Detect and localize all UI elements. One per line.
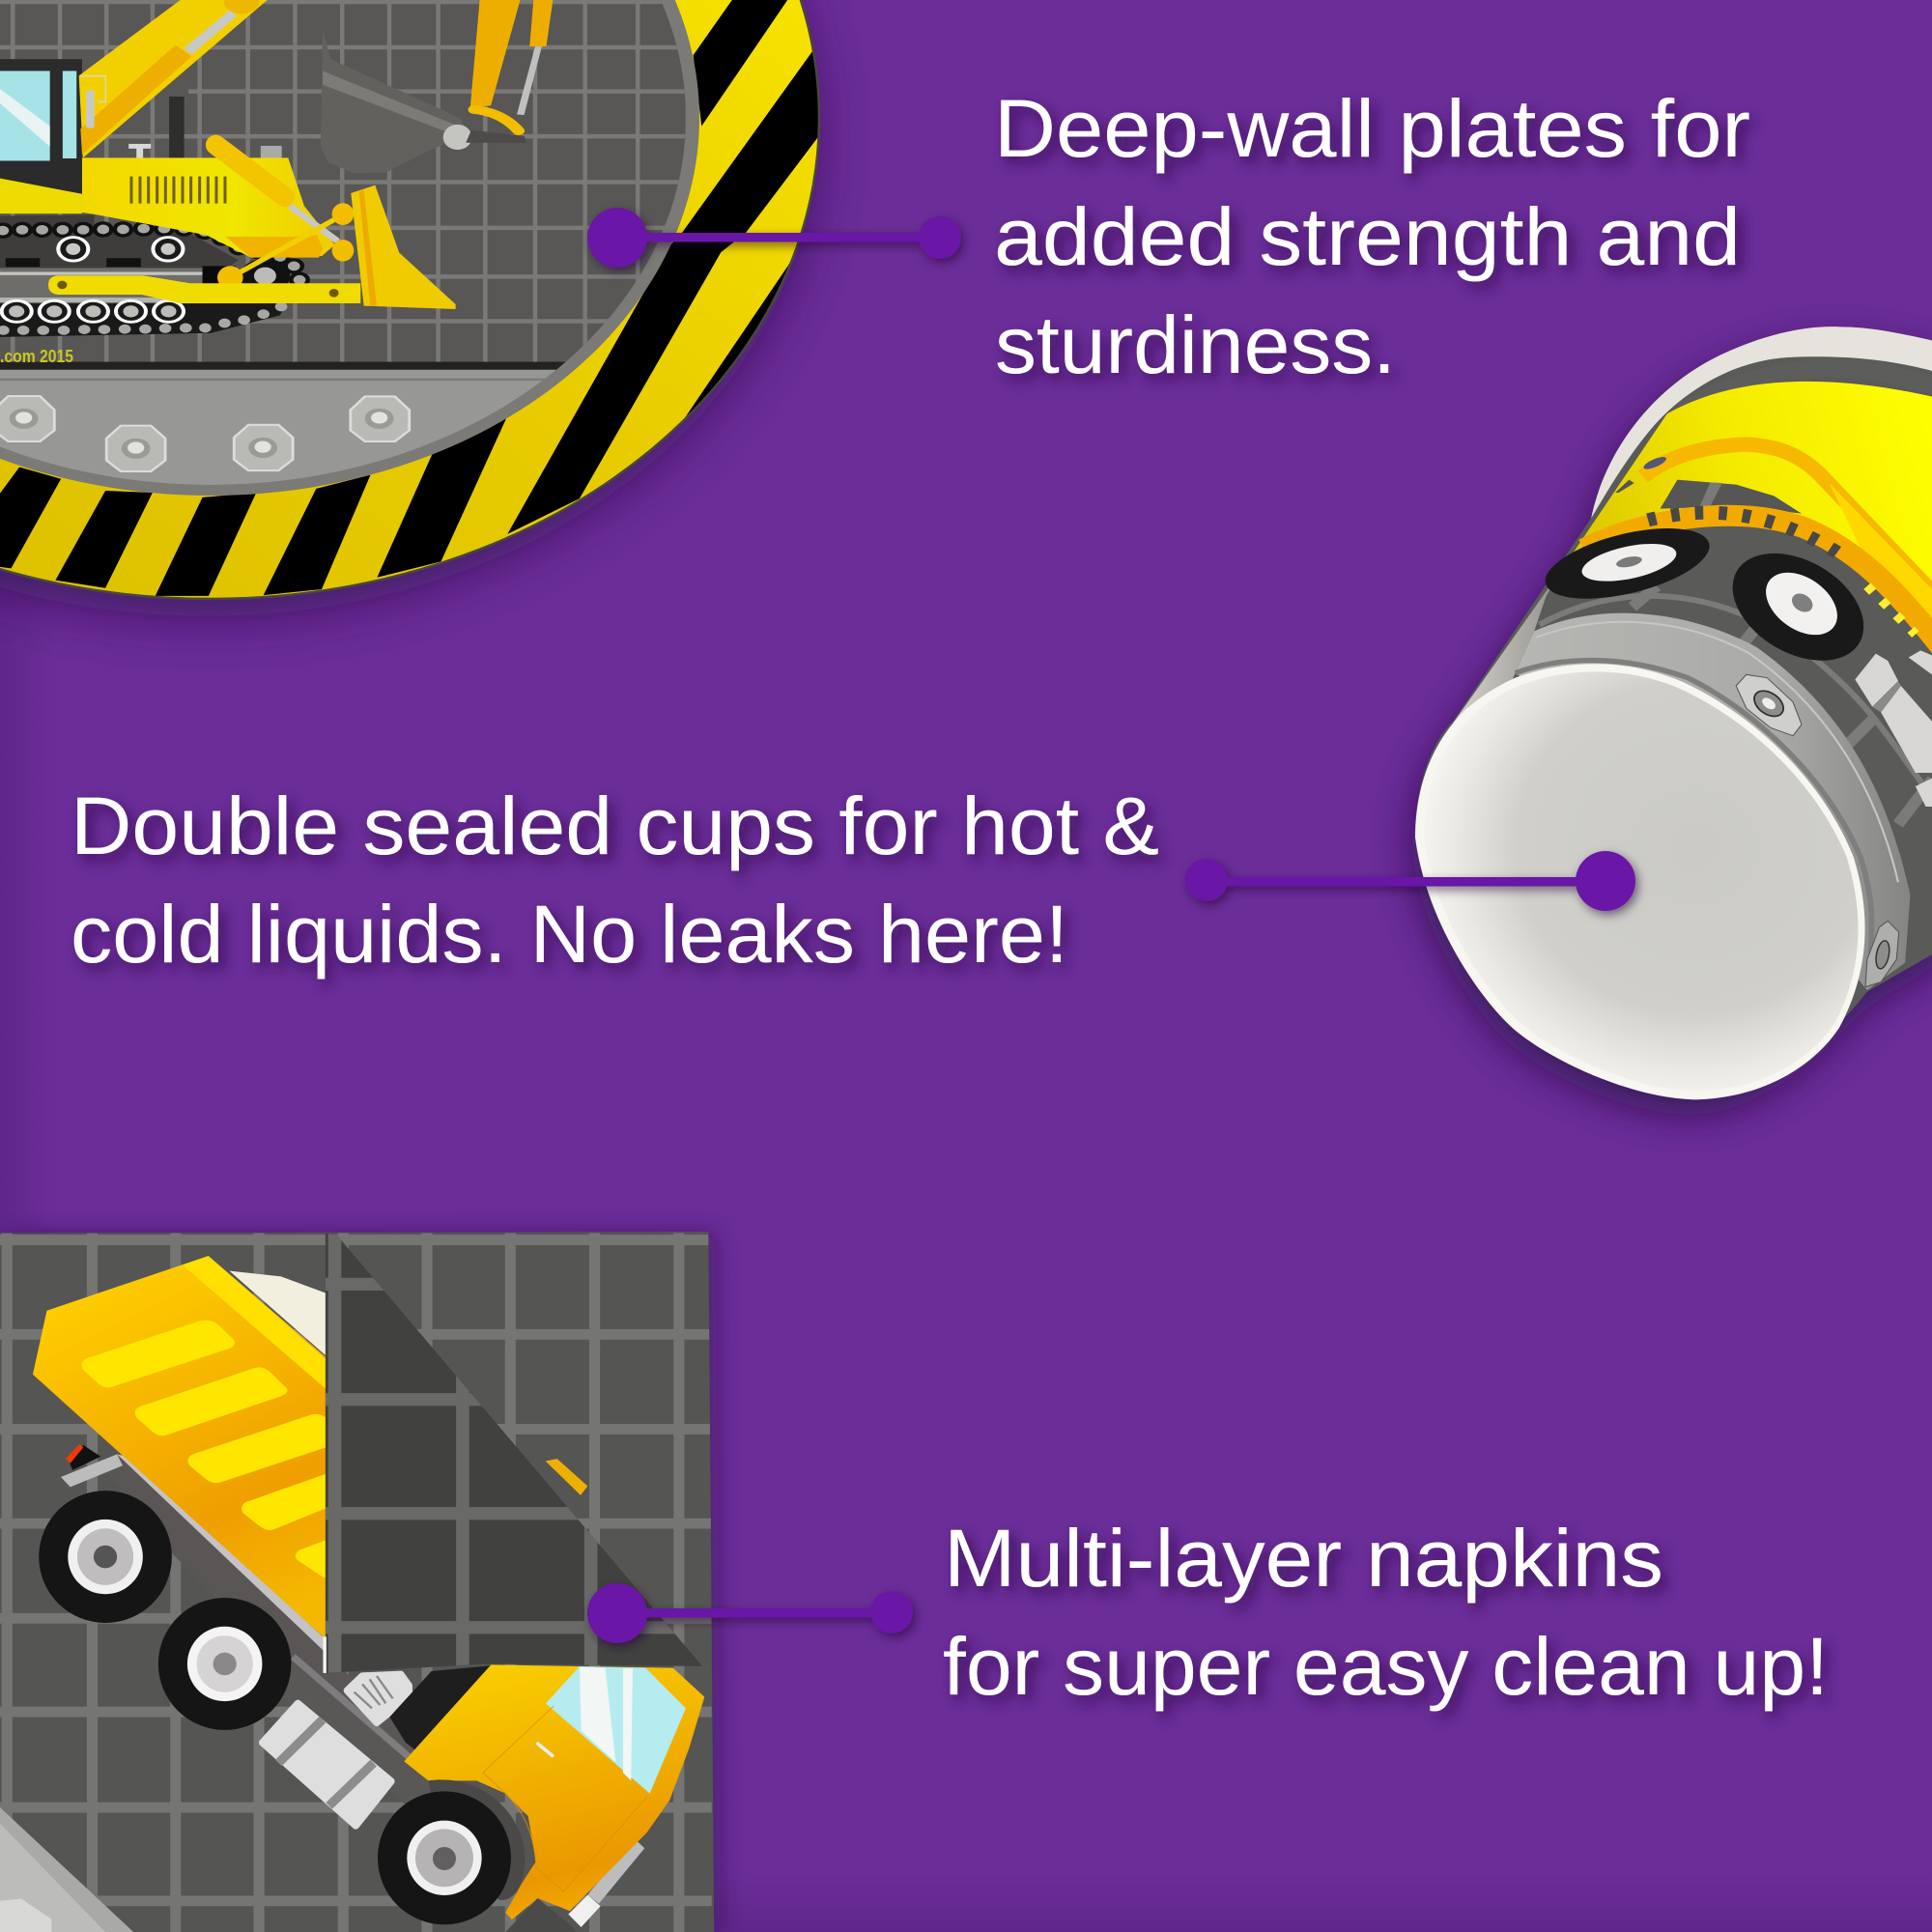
cab body [404,1664,704,1919]
truck wheels: rear [39,1491,291,1730]
text: napkins [943,1513,1829,1712]
cup truck stripe [1643,444,1932,669]
excavator boom, body and blade [48,0,456,309]
cup metal band [1516,613,1910,990]
connector: napkin [587,1583,913,1643]
cup silhouette [1415,327,1932,1099]
small tank [347,1674,409,1722]
grid [0,0,721,364]
bottom-left plate corner [0,1805,133,1932]
bed ribs [81,1321,330,1577]
vent [131,177,225,204]
truck chassis front [268,1645,451,1806]
cup bolts [1736,674,1802,736]
text: cups: Double sealed cups for hot & [71,781,1159,871]
panel: plate [0,0,832,599]
cup base [1415,664,1865,1099]
road gap [505,1898,577,1932]
cup rim [1591,327,1932,519]
blade piston [215,145,285,197]
cup tanks [1855,650,1932,807]
napkin grid [0,1234,712,1932]
cup truck window [1661,480,1802,514]
text: napkins: for super easy clean up! [943,1621,1829,1712]
napkin base [0,1232,714,1932]
connector: cup [1185,851,1635,911]
door details [483,1706,647,1891]
exhaust [169,97,185,159]
text: cups: cold liquids. No leaks here! [71,889,1068,980]
blade [351,185,456,309]
stick [470,0,521,107]
bucket [321,32,469,174]
plate rim [0,0,699,496]
large tank [263,1703,391,1826]
text: cups [71,781,1159,980]
text: napkins: Multi-layer napkins [944,1513,1663,1604]
upper track wheels [58,238,183,261]
panel: cup [1415,327,1932,1099]
bumper [587,1838,644,1904]
plate hazard stripes [0,0,832,596]
plate edge [0,0,819,599]
body [82,157,335,258]
lower track [0,268,205,303]
boom [79,0,268,157]
text: plates: added strength and [994,191,1741,282]
blade arm [48,275,360,303]
cab [0,59,82,195]
cab window [546,1666,686,1794]
cup lower grid [1540,586,1932,838]
truck tail light [61,1444,123,1487]
napkin fold [323,1234,702,1673]
text: plates: sturdiness. [995,299,1396,390]
upper track [0,214,239,272]
panel [0,361,566,371]
plate border [0,0,819,599]
panel: napkin [0,1232,714,1932]
connector: plate [587,208,961,268]
text: plates [994,83,1750,390]
truck front [263,1664,704,1932]
text: plates: Deep-wall plates for [994,83,1750,174]
cup wheels [1538,515,1886,683]
exhaust stack [389,1665,493,1750]
front wheel [378,1779,525,1924]
bolts [0,396,410,471]
dump bed [230,1271,330,1359]
cup track [1584,513,1932,667]
cup paper seam [1453,562,1567,723]
cup yellow body [1567,382,1932,669]
truck chassis [107,1459,459,1805]
plate copyright text: .com 2015 [0,347,73,366]
plate centre: grid and excavator [0,0,686,485]
